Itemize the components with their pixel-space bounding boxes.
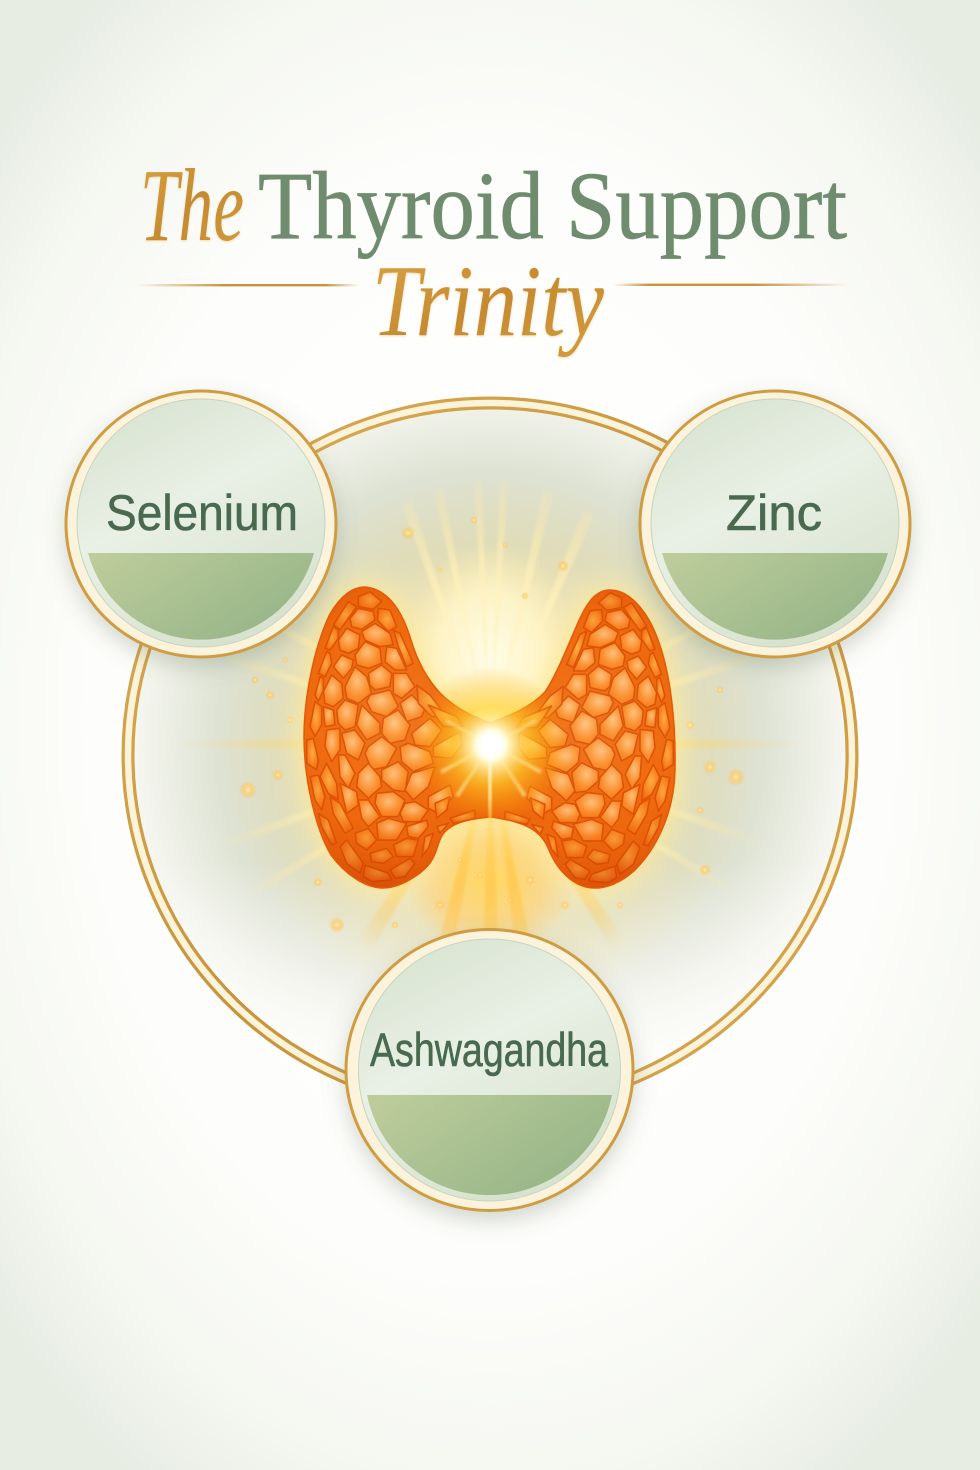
title divider left [135, 284, 359, 286]
isthmus light streak [488, 745, 492, 821]
badge label: Ashwagandha [370, 1023, 609, 1076]
pale glow above gland [400, 545, 580, 775]
thyroid outer glow [304, 587, 675, 888]
big connecting ring [128, 403, 852, 1107]
title [135, 148, 849, 358]
star spikes [440, 719, 542, 797]
badge label: Zinc [726, 485, 822, 541]
title divider right [613, 284, 849, 286]
right lobe cells [505, 593, 673, 883]
badge: Ashwagandha [346, 930, 633, 1210]
badge face [651, 399, 899, 647]
sparkles [239, 516, 745, 933]
right lobe shading [490, 590, 675, 888]
left lobe cells [307, 592, 475, 882]
badge face [358, 939, 620, 1201]
right lobe base [490, 590, 675, 888]
badge frame [346, 930, 633, 1210]
ring cream centre [128, 403, 852, 1107]
central star core [477, 731, 505, 759]
badge face [77, 399, 325, 647]
title words: Thyroid Support: Thyroid Support [258, 152, 847, 259]
title word: Trinity: Trinity [372, 245, 605, 358]
ring inner glow disc [128, 403, 852, 1107]
badge lower band [662, 553, 888, 640]
badge: Zinc [640, 391, 910, 657]
badge lower band [367, 1095, 612, 1195]
badge lower band [88, 553, 314, 640]
halo [220, 475, 760, 1015]
right lobe [490, 590, 675, 888]
horizontal flare [170, 738, 810, 750]
golden rays below gland [358, 745, 632, 985]
left lobe shading [304, 587, 490, 888]
badge: Selenium [66, 391, 336, 657]
badge label: Selenium [106, 485, 298, 541]
sun rays [220, 478, 770, 900]
left lobe [304, 587, 490, 888]
golden glow below gland [405, 805, 575, 955]
left lobe base [304, 587, 490, 888]
central glow [413, 667, 569, 823]
light burst [170, 475, 810, 1015]
badge frame [66, 391, 336, 657]
disc lower fade [128, 403, 852, 1107]
badge frame [640, 391, 910, 657]
thyroid gland [304, 587, 675, 888]
title word: The: The [140, 148, 244, 263]
ring gold band [128, 403, 852, 1107]
